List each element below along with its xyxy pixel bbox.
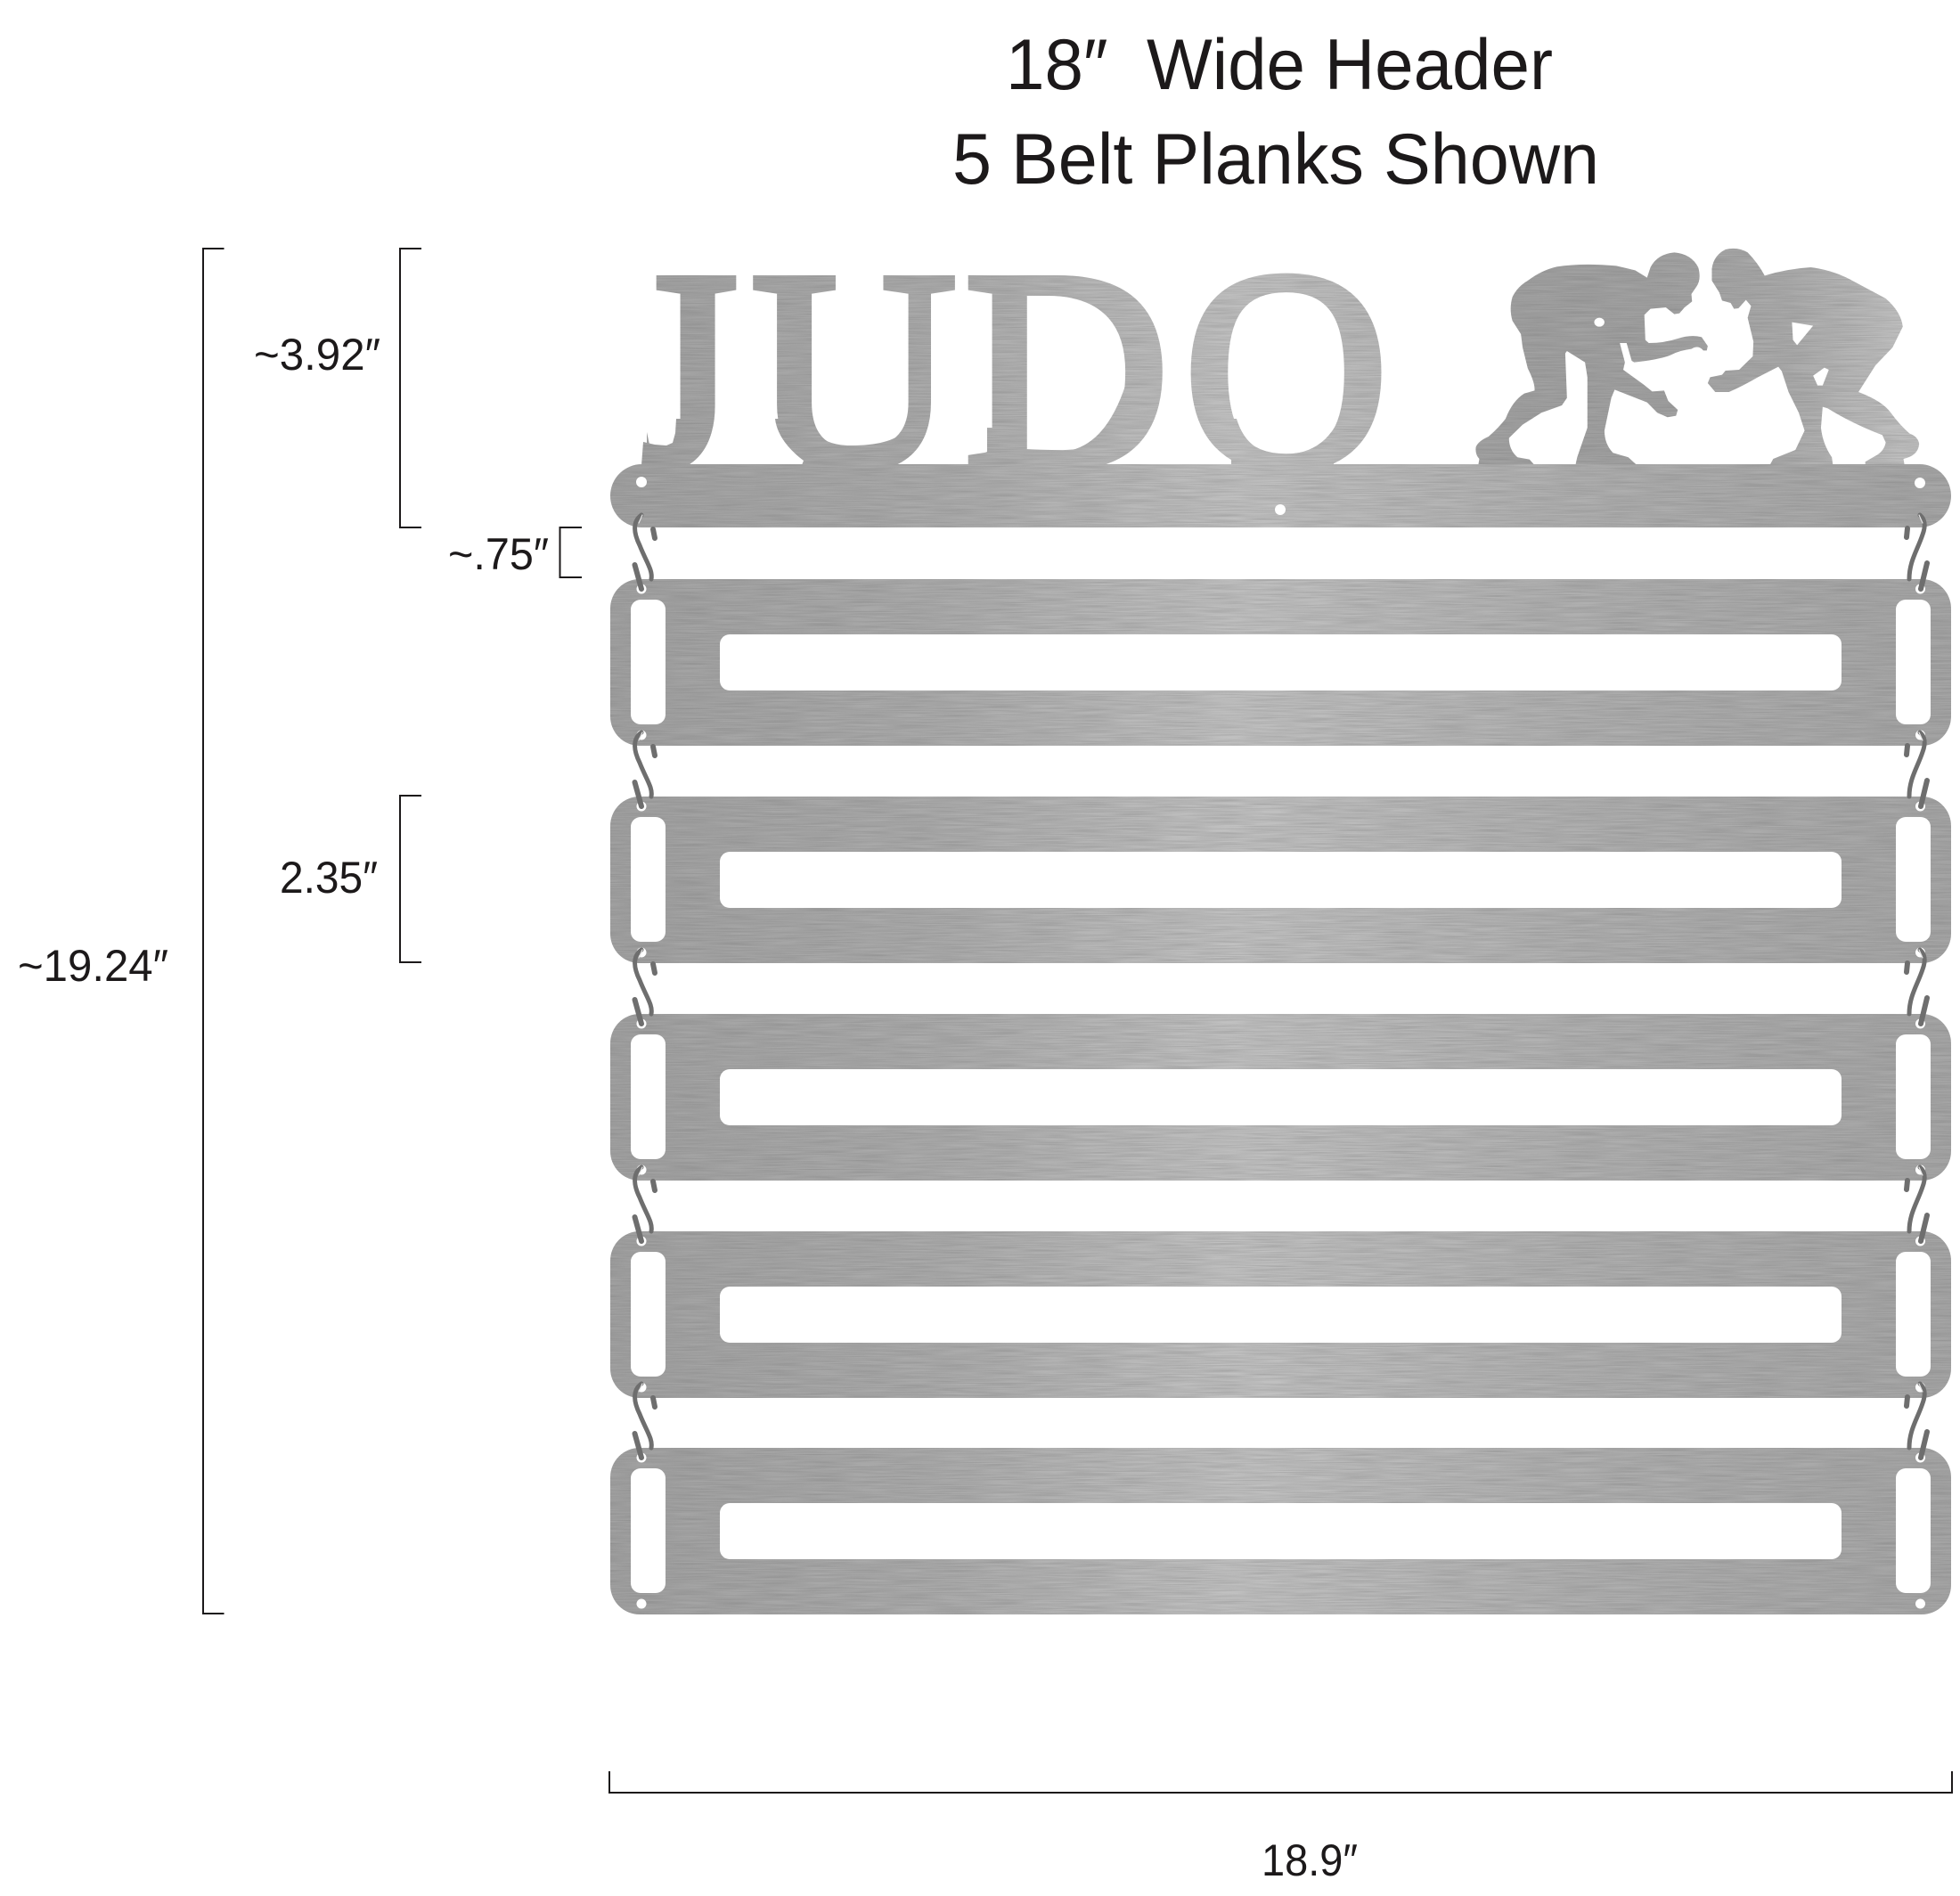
lettering: JUDO: JUDO [627, 213, 1389, 528]
belt plank 2 [610, 797, 1951, 963]
belt plank 1 [610, 579, 1951, 746]
icon: two wrestlers silhouette [1475, 252, 1708, 465]
S-hooks left side [634, 515, 655, 1458]
wrestler left [1475, 252, 1708, 465]
label: plank height: 2.35″ [280, 853, 378, 903]
label: gap between planks: ~.75″ [448, 529, 549, 579]
title: 18 inch wide header: 18″ Wide Header [1006, 25, 1553, 105]
label: total width: 18.9″ [1262, 1835, 1358, 1885]
belt plank 3 [610, 1014, 1951, 1181]
wrestler right [1708, 249, 1919, 465]
metal rack [610, 213, 1951, 1614]
bracket: total width [609, 1771, 1952, 1793]
S-hooks right side [1907, 515, 1927, 1458]
belt plank 4 [610, 1231, 1951, 1398]
belt plank 5 [610, 1448, 1951, 1614]
bracket: header height [400, 249, 421, 527]
title: 5 belt planks shown: 5 Belt Planks Shown [952, 119, 1599, 200]
bracket: total height [203, 249, 225, 1614]
bracket: plank height [400, 796, 421, 962]
lettering: JUDO [641, 273, 1381, 464]
label: header height: ~3.92″ [254, 330, 380, 380]
header bar [610, 464, 1951, 527]
label: total height: ~19.24″ [18, 941, 168, 991]
bracket: gap between planks [559, 527, 582, 577]
